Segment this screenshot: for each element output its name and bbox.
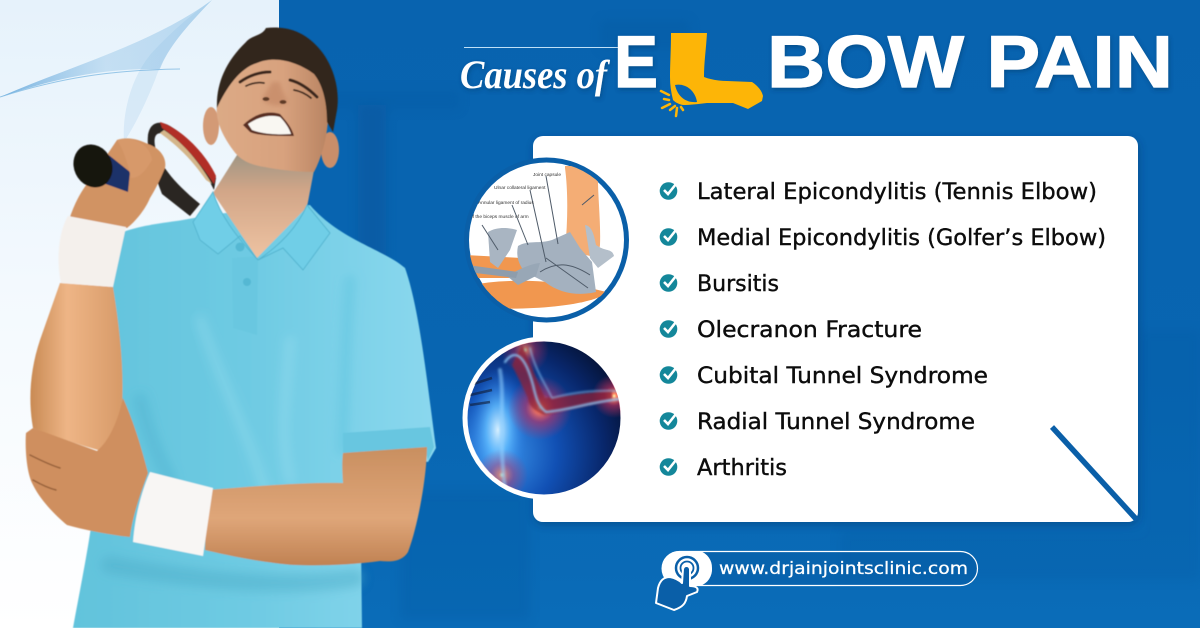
anatomy labels: Ulnar collateral ligament bbox=[494, 185, 546, 191]
mouth and teeth bbox=[243, 112, 294, 136]
list item 3 bbox=[660, 271, 779, 297]
upper arm bbox=[565, 166, 600, 258]
anatomy labels: of the biceps muscle of arm bbox=[470, 214, 529, 220]
elbow-holding hand bbox=[26, 398, 148, 537]
list item 1: Lateral Epicondylitis (Tennis Elbow) bbox=[697, 179, 1097, 205]
website address: www.drjainjointsclinic.com bbox=[719, 559, 968, 578]
title bbox=[460, 22, 1173, 116]
upper wristband bbox=[59, 216, 126, 287]
gripping hand bbox=[70, 138, 165, 228]
neck bbox=[213, 155, 315, 258]
person: tennis player holding elbow bbox=[26, 28, 436, 628]
icon: elbow joint L bbox=[661, 33, 763, 116]
lower forearm bbox=[205, 447, 427, 565]
eyes and brows bbox=[240, 72, 317, 98]
icon: pointing hand bbox=[656, 557, 698, 610]
panel: causes list bbox=[533, 136, 1138, 522]
sleeve hem bbox=[343, 427, 434, 460]
lower wristband bbox=[133, 472, 213, 556]
rule line bbox=[464, 47, 618, 48]
racket grip bbox=[66, 138, 130, 194]
hair bbox=[217, 28, 338, 132]
placket bbox=[232, 256, 258, 335]
racket bbox=[148, 122, 216, 216]
shirt bbox=[73, 205, 436, 628]
nose bbox=[262, 82, 288, 106]
list item 2: Medial Epicondylitis (Golfer’s Elbow) bbox=[697, 225, 1106, 251]
shirt folds bbox=[110, 280, 355, 583]
forearm bones bbox=[478, 281, 606, 309]
letter E: E bbox=[614, 22, 658, 103]
website link pill bbox=[656, 551, 978, 610]
list item 3: Bursitis bbox=[697, 271, 779, 297]
finger lines bbox=[30, 455, 60, 490]
head bbox=[203, 28, 339, 172]
circle: elbow anatomy illustration bbox=[465, 160, 626, 320]
causes of: Causes of bbox=[460, 52, 610, 97]
left ear bbox=[203, 107, 219, 145]
anatomy labels: Joint capsule bbox=[533, 172, 561, 178]
collar bbox=[193, 192, 330, 270]
anatomy labels bbox=[470, 172, 561, 220]
right ear bbox=[321, 132, 339, 168]
decorative corner stroke bbox=[1052, 427, 1137, 520]
BOW PAIN: BOW PAIN bbox=[767, 22, 1173, 103]
anatomy labels: Annular ligament of radius bbox=[478, 200, 534, 206]
ligaments bbox=[468, 225, 614, 294]
list item 4: Olecranon Fracture bbox=[697, 317, 922, 343]
list item 6: Radial Tunnel Syndrome bbox=[697, 409, 975, 435]
raised forearm bbox=[30, 283, 123, 450]
list item 7: Arthritis bbox=[697, 455, 787, 481]
shirt buttons bbox=[236, 242, 251, 286]
face bbox=[217, 54, 328, 172]
list item 5: Cubital Tunnel Syndrome bbox=[697, 363, 988, 389]
fingers over grip bbox=[117, 139, 152, 178]
circle: glowing elbow joint pain bbox=[462, 337, 621, 499]
decorative wave swoosh bbox=[0, 0, 212, 142]
